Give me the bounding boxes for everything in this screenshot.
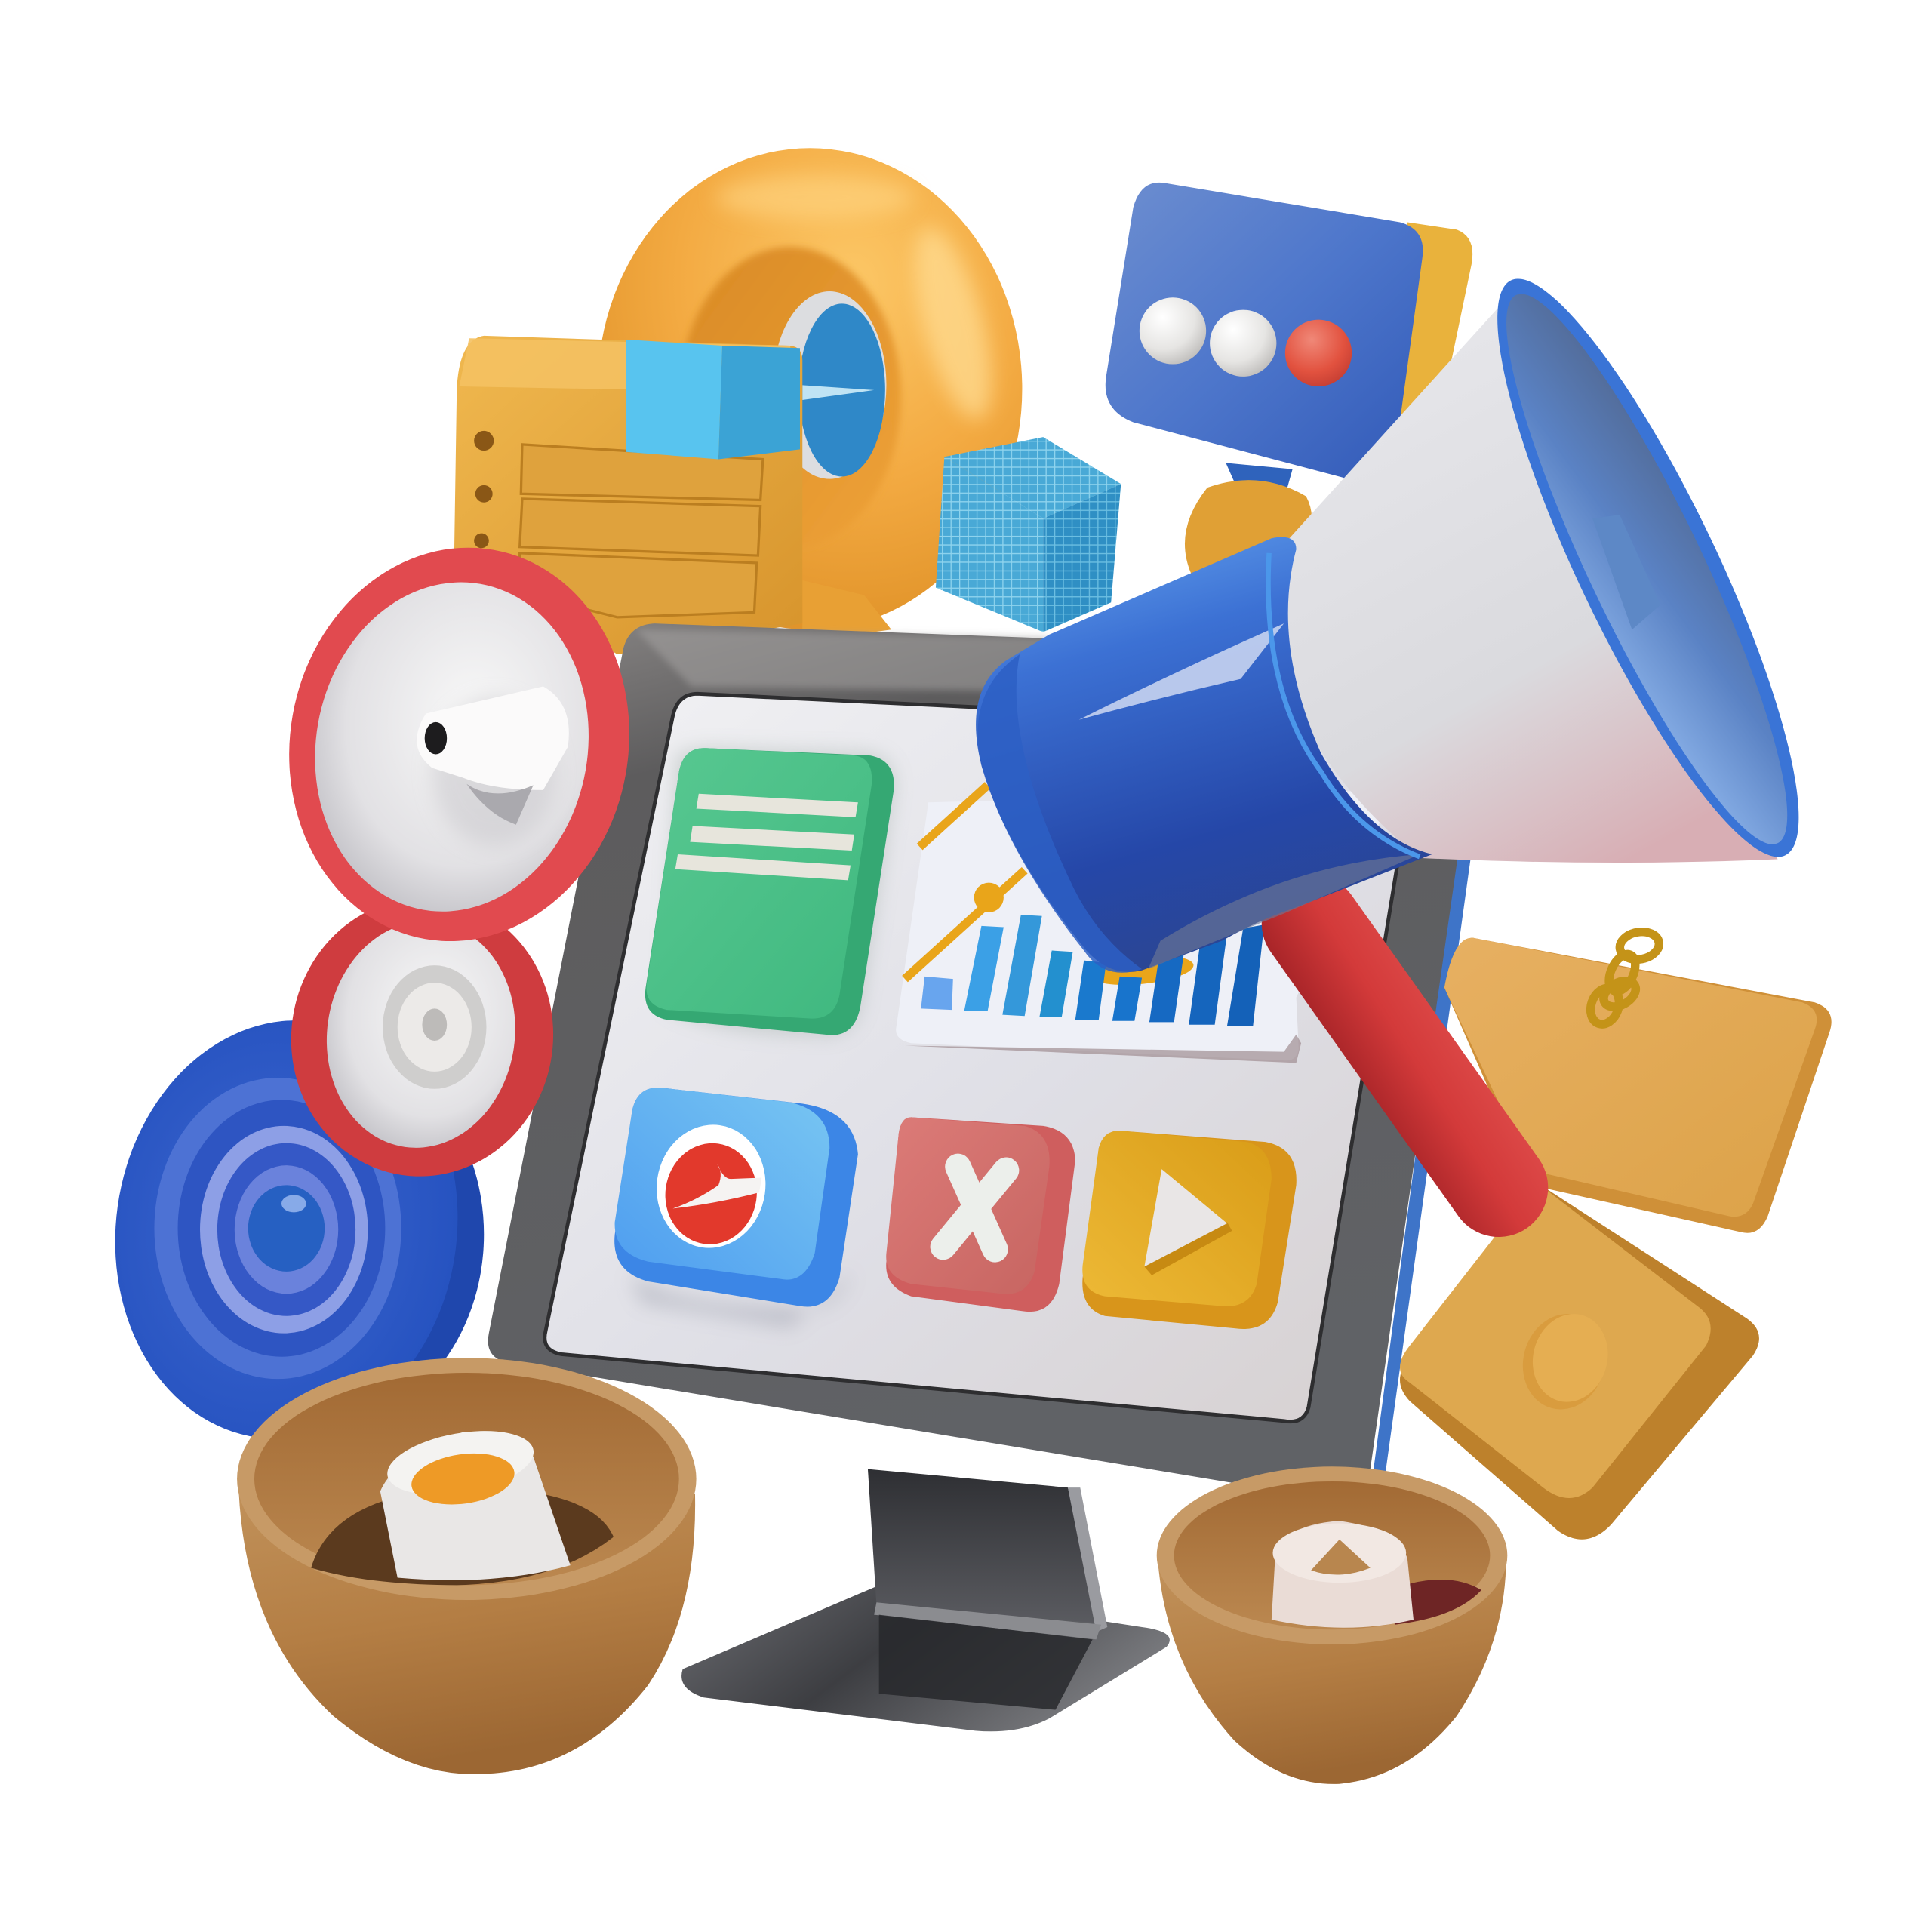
bar chart panel (896, 785, 1395, 1063)
megaphone cone (1271, 297, 1778, 863)
speech bubble on stand (1106, 183, 1472, 574)
blue button with red logo (614, 1088, 858, 1327)
chart bars (921, 915, 1264, 1026)
pink roll (1272, 1521, 1414, 1628)
orange torus ring (598, 148, 1022, 642)
mesh cube (936, 437, 1121, 632)
play triangle icon (1144, 1169, 1232, 1275)
small bowl with roll (1157, 1466, 1507, 1784)
X icon (943, 1167, 1006, 1249)
large bowl with roll (237, 1358, 697, 1774)
monitor screen (545, 694, 1420, 1422)
bubble dots (1140, 297, 1352, 386)
green document card (645, 748, 894, 1035)
orange trend line (905, 785, 1195, 989)
yellow play button (1082, 1131, 1297, 1329)
red speaker lower (273, 881, 571, 1193)
white roll (380, 1421, 571, 1580)
red close button (886, 1117, 1075, 1312)
blue speaker disc (88, 998, 485, 1461)
monitor stand (681, 1469, 1170, 1731)
megaphone handle (1311, 924, 1499, 1188)
orange boards right (1400, 929, 1832, 1540)
blue and white megaphone (976, 251, 1847, 1188)
gold chain (1586, 929, 1661, 1028)
upper card (1444, 938, 1832, 1233)
megaphone body (976, 537, 1432, 972)
monitor (488, 623, 1483, 1502)
lower card (1400, 1183, 1759, 1540)
red speaker upper (258, 521, 660, 968)
megaphone bell rim (1448, 251, 1847, 885)
orange server box (454, 336, 802, 654)
light blue cube (626, 340, 800, 460)
